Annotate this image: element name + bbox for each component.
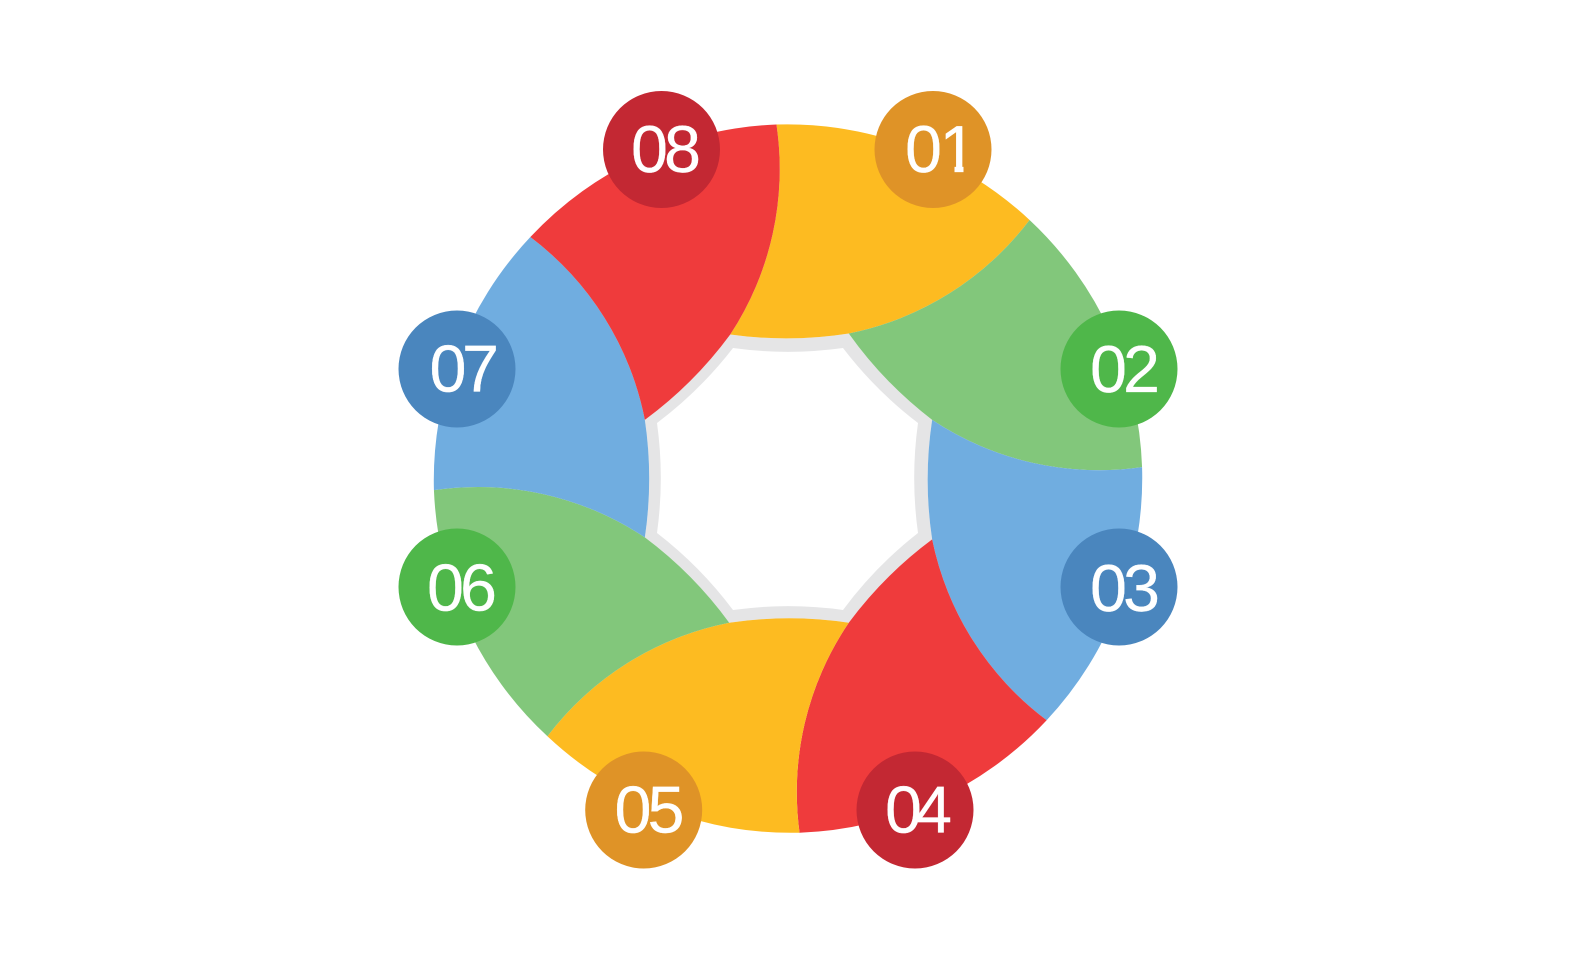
badge 03: 03 [1090,552,1158,626]
badge 06: 06 [427,552,495,626]
segment 08: red [530,125,780,420]
badge 03 [1060,528,1178,646]
inner ring: grey outline [645,333,932,623]
badge 01: 01 [905,113,974,187]
badge 08: 08 [631,113,699,187]
badge 07: 07 [430,332,496,406]
badge 02: 02 [1090,333,1157,407]
segment 01: yellow [730,124,1030,338]
center: white opening [657,348,918,610]
badge 02 [1060,310,1178,428]
ring: eight coloured segments [434,124,1142,833]
badge 04: 04 [885,774,951,848]
badge 05: 05 [614,774,682,848]
badge 04 [856,752,974,868]
badge 08 [603,91,720,208]
segment 04: red [797,539,1047,833]
badge 06 [398,528,516,646]
badge 01 [874,91,992,208]
segment 03: blue [928,420,1142,720]
segment 07: blue [434,237,649,537]
segment 02: green [849,220,1142,470]
segment 06: green [434,487,729,736]
badge 07 [398,310,516,428]
badge 05 [585,752,702,868]
segment 05: yellow [547,618,849,833]
